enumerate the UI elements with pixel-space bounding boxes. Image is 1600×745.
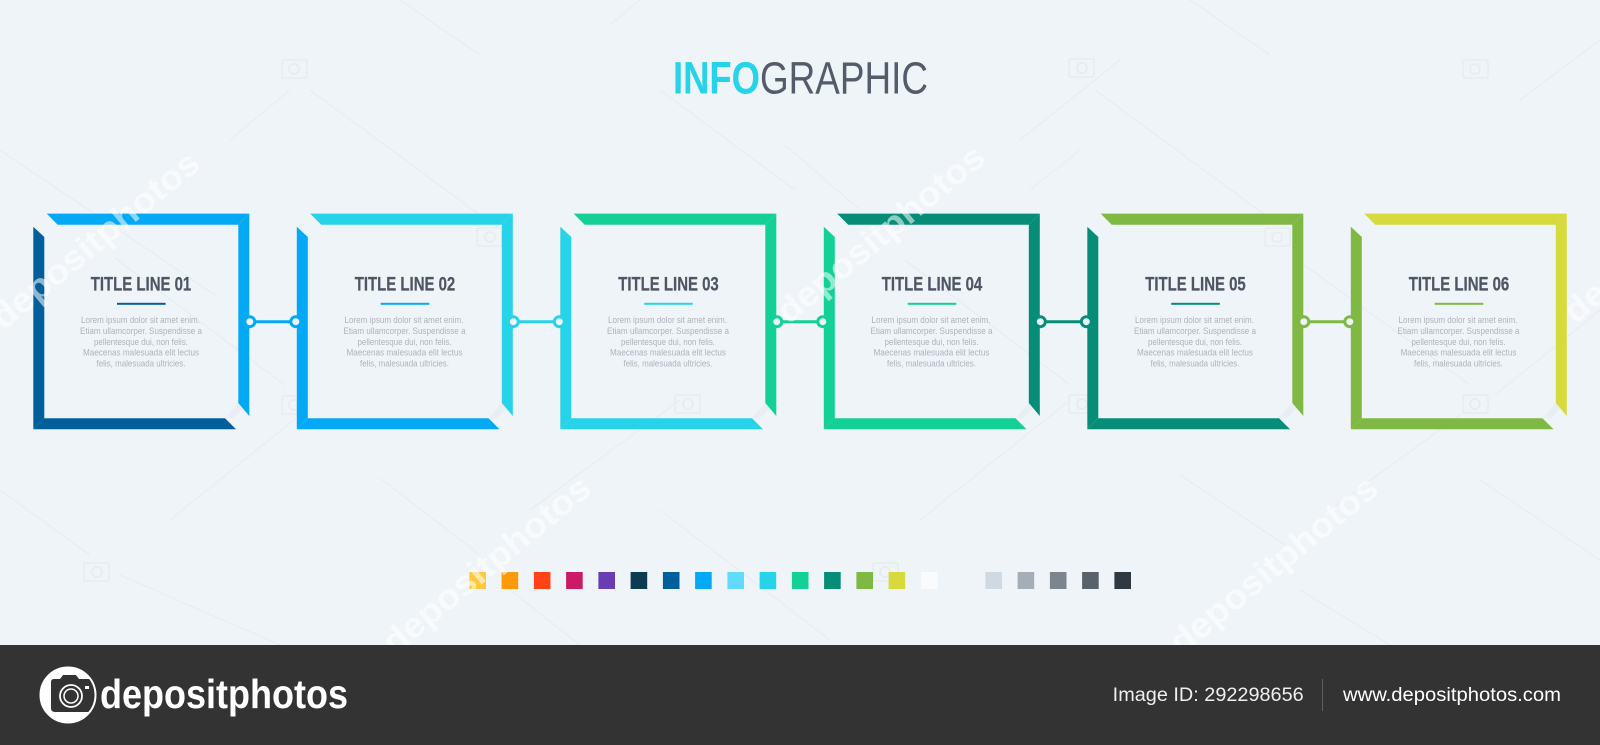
connector: 02 to 03 (508, 317, 564, 327)
image id: Image ID: 292298656 (1113, 684, 1304, 706)
panel: step 03 (560, 214, 776, 429)
panel: step 02: felis, malesuada ultricies. (360, 358, 449, 370)
website url: www.depositphotos.com (1342, 684, 1561, 706)
panel: step 06: Etiam ullamcorper. Suspendisse a (1398, 326, 1520, 337)
panel: step 02 (297, 214, 513, 429)
panel: step 06: Maecenas malesuada elit lectus (1400, 348, 1517, 359)
watermark text: depositphotos (1162, 468, 1386, 662)
panel: step 01: Etiam ullamcorper. Suspendisse a (80, 326, 203, 337)
panel: step 02: Maecenas malesuada elit lectus (346, 348, 463, 359)
panel: step 02: Lorem ipsum dolor sit amet enim. (344, 315, 464, 326)
colour palette swatches (469, 572, 1131, 589)
panel: step 04: felis, malesuada ultricies. (887, 358, 976, 370)
connector: 01 to 02 (245, 317, 301, 327)
panel: step 01: Lorem ipsum dolor sit amet enim. (81, 315, 200, 326)
panel: step 03: Lorem ipsum dolor sit amet enim. (608, 315, 727, 326)
icon: watermark cameras (84, 59, 1488, 581)
panel: step 05: TITLE LINE 05 (1145, 274, 1246, 296)
panel: step 06: pellentesque dui, non felis. (1412, 337, 1506, 348)
panel: step 01: Maecenas malesuada elit lectus (83, 348, 199, 359)
panel: step 03: TITLE LINE 03 (618, 274, 719, 296)
panel: step 03: felis, malesuada ultricies. (624, 358, 712, 370)
watermark text (0, 137, 1600, 662)
panel: step 06: TITLE LINE 06 (1409, 274, 1509, 296)
panel: step 05: felis, malesuada ultricies. (1150, 358, 1240, 370)
panel: step 05 (1087, 214, 1303, 429)
panel: step 04: Maecenas malesuada elit lectus (874, 348, 990, 359)
panel: step 02: TITLE LINE 02 (355, 274, 455, 296)
panel: step 01: TITLE LINE 01 (91, 274, 191, 296)
footer bar (0, 645, 1600, 745)
panel: step 02: Etiam ullamcorper. Suspendisse a (344, 326, 466, 337)
panel: step 05: Lorem ipsum dolor sit amet enim. (1135, 315, 1254, 326)
panel: step 06: Lorem ipsum dolor sit amet enim. (1398, 315, 1518, 326)
panel: step 06: felis, malesuada ultricies. (1414, 358, 1503, 370)
connector: 03 to 04 (772, 317, 828, 327)
panel: step 04: pellentesque dui, non felis. (884, 337, 978, 348)
icon: camera logo (40, 667, 96, 723)
title: GRAPHIC (760, 52, 928, 103)
panel: step 03: Maecenas malesuada elit lectus (610, 348, 726, 359)
watermark text: depositphotos (769, 137, 993, 331)
panel: step 01: felis, malesuada ultricies. (96, 358, 186, 370)
panel: step 03: Etiam ullamcorper. Suspendisse a (607, 326, 730, 337)
panel: step 06 (1351, 214, 1567, 429)
title (673, 52, 928, 103)
panel: step 04: Etiam ullamcorper. Suspendisse a (870, 326, 993, 337)
panel: step 01: pellentesque dui, non felis. (94, 337, 188, 348)
logo wordmark: depositphotos (100, 671, 348, 717)
title: INFO (673, 52, 760, 103)
connector: 05 to 06 (1299, 317, 1355, 327)
panel: step 04 (824, 214, 1040, 429)
connector: 04 to 05 (1035, 317, 1091, 327)
panel: step 05: Etiam ullamcorper. Suspendisse a (1134, 326, 1257, 337)
panel: step 03: pellentesque dui, non felis. (621, 337, 715, 348)
panel: step 05: Maecenas malesuada elit lectus (1137, 348, 1253, 359)
panel: step 01 (33, 214, 249, 429)
watermark text: depositphotos (375, 468, 599, 662)
panel: step 04: Lorem ipsum dolor sit amet enim. (872, 315, 990, 326)
panel: step 02: pellentesque dui, non felis. (358, 337, 452, 348)
panel: step 05: pellentesque dui, non felis. (1148, 337, 1242, 348)
panel: step 04: TITLE LINE 04 (882, 274, 982, 296)
